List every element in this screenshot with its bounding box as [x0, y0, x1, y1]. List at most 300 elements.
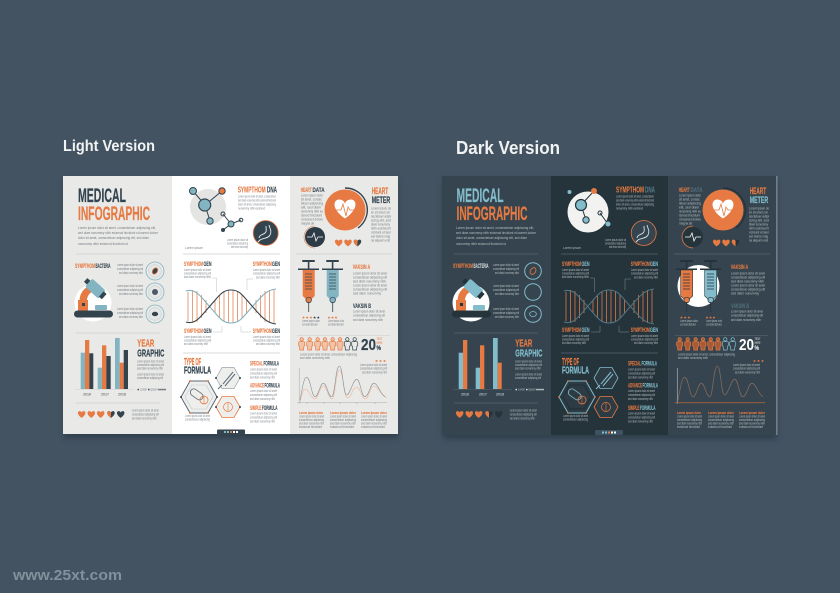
intro text: nonummy nibh euismod tincidunt ut [78, 242, 128, 246]
column note 2 [330, 411, 356, 429]
advance formula: FORMULA [642, 383, 658, 389]
panel: middle [172, 176, 290, 434]
heading: symptom dna: SYMPTHOM [238, 186, 266, 195]
column note 2: consectetuer adipiscing [708, 418, 734, 422]
heading: heart meter: HEART [750, 186, 766, 197]
heading: symptom dna: SYMPTHOM [616, 186, 644, 195]
label: gene bottom left: consectetuer adipiscing elit [562, 338, 589, 342]
column note 1: Lorem ipsum dolor sit amet [299, 414, 324, 418]
text: formula caption: Lorem ipsum dolor sit amet [185, 414, 210, 418]
label: gene top left [184, 262, 212, 279]
column note 1: Lorem ipsum dolor [677, 411, 701, 415]
title: medical infographic [456, 186, 528, 225]
stat: 20 percent: TEXT [376, 337, 383, 341]
text: hearts note: sed diam nonummy nibh [510, 416, 535, 420]
label: gene top left: Lorem ipsum dolor sit amet [184, 268, 211, 272]
text: heart meter: scing elit, sed [371, 218, 391, 222]
icon: orange syringe [676, 260, 697, 312]
text: hearts note: Lorem ipsum dolor sit amet [510, 408, 537, 412]
text: heart meter: na aliquam erat [749, 238, 768, 242]
simple formula: consectetuer adipiscing elit [628, 416, 655, 420]
text: chart note: sed diam nonummy nibh [362, 370, 387, 374]
network molecule diagram [568, 188, 610, 232]
text: bacteria note 1: Lorem ipsum dolor sit amet [493, 263, 519, 267]
heading: year graphic [137, 338, 165, 360]
caption: network left: Lorem ipsum [563, 246, 581, 250]
text: symptom dna: dolor sit amet, consectetuer adipiscing [238, 202, 276, 206]
label: gene top left: Lorem ipsum dolor sit amet [562, 268, 589, 272]
text: bacteria note 3: consectetuer adipiscing elit [493, 311, 519, 315]
intro text: sed diam nonummy nibh euismod tincidunt ut laoreet dolore [456, 231, 536, 235]
text: heart meter: eet dolore mag [371, 234, 390, 238]
advance formula: sed diam nonummy nibh [628, 397, 653, 401]
icon: teal syringe [322, 260, 343, 312]
text: heart meter: sectetuer adipi [749, 214, 769, 218]
column note 3: euismod tincidunt [361, 425, 385, 429]
icon: orange syringe [298, 260, 319, 312]
text: chart note: Lorem ipsum dolor sit amet [733, 363, 760, 367]
advance formula: sed diam nonummy nibh [250, 397, 275, 401]
text: symptom dna [238, 194, 277, 210]
column note 3: Lorem ipsum dolor [361, 411, 387, 415]
label: gene bottom left: sed diam nonummy nibh [562, 341, 586, 345]
intro text: nonummy nibh euismod tincidunt ut [456, 242, 506, 246]
heading: heart meter: METER [750, 195, 768, 206]
text: bacteria note 1 [493, 263, 519, 275]
chart legend [138, 388, 166, 392]
title: medical infographic: MEDICAL [456, 186, 504, 207]
column note 2: sed diam nonummy nibh [708, 422, 734, 426]
text: hearts note [510, 408, 537, 420]
text: symptom dna: nonummy nibh euismod [238, 206, 265, 210]
text: heart data: sit amet, consec [679, 198, 700, 202]
label: gene top right: consectetuer adipiscing elit [253, 272, 280, 276]
icon: pulse circle [682, 226, 703, 248]
icon: pulse circle [304, 226, 325, 248]
intro text: dolor sit amet, consectetuer adipiscing elit, sed diam [456, 236, 527, 240]
label: gene top left [562, 262, 590, 279]
label: gene bottom left: sed diam nonummy nibh [184, 342, 208, 346]
special formula [250, 362, 279, 380]
label: gene top right: SYMPTHOM [631, 262, 650, 268]
icon: bacteria circle 3 [146, 305, 164, 323]
label: gene bottom right: SYMPTHOM [253, 329, 272, 335]
label: gene top right [253, 262, 280, 280]
simple formula: Lorem ipsum dolor sit amet [628, 412, 655, 416]
column note 2: sed diam nonummy nibh [330, 422, 356, 426]
vaccine b: VAKSIN B [731, 304, 749, 310]
text: heart data: sit amet, consec [301, 198, 322, 202]
page tab [595, 430, 623, 435]
special formula: sed diam nonummy nibh [628, 376, 653, 380]
stat: 20 percent: 20 [739, 337, 754, 354]
text: bacteria note 1: sed diam nonummy nibh [119, 271, 143, 275]
simple formula: FORMULA [262, 406, 278, 412]
stat: 20 percent: TEXT [754, 337, 761, 341]
column note 2: euismod tincidunt [330, 425, 354, 429]
dna helix [186, 278, 276, 332]
text: people note: Lorem ipsum dolor sit amet, consectetuer adipiscing [678, 352, 735, 356]
column note 2: Lorem ipsum dolor [708, 411, 734, 415]
text: heart data: tetuer adipiscing [679, 202, 701, 206]
text: heart meter: ncidunt ut laor [749, 230, 770, 234]
label: gene bottom left: SYMPTHOM [184, 329, 203, 335]
text: formula caption [563, 414, 588, 422]
special formula: SPECIAL [628, 362, 641, 368]
hexagon: syringe [594, 368, 618, 389]
text: heart data: tetuer adipiscing [301, 202, 323, 206]
column note 3 [361, 411, 387, 429]
text: year graphic description: consectetuer adipiscing elit [515, 376, 541, 380]
text: formula caption: consectetuer adipiscing [185, 418, 210, 422]
text: bacteria note 2: sed diam nonummy nibh [119, 292, 143, 296]
caption: network right: consectetuer adipiscing [227, 242, 248, 246]
pictogram: people [677, 338, 736, 350]
vaccine a: Lorem ipsum dolor sit amet [353, 272, 387, 276]
advance formula: ADVANCE [628, 383, 642, 389]
heading: light version: Light Version [63, 138, 155, 155]
column note 1: sed diam nonummy nibh [677, 422, 702, 426]
intro text: Lorem ipsum dolor sit amet, consectetuer adipiscing elit, [78, 226, 156, 230]
label: gene bottom left [562, 328, 590, 345]
text: bacteria note 2 [117, 284, 143, 296]
panel: left [63, 176, 172, 434]
special formula: consectetuer adipiscing elit [250, 372, 277, 376]
vaccine a [731, 265, 765, 296]
vaccine b: VAKSIN B [353, 304, 371, 310]
label: gene bottom right: sed diam nonummy nibh [634, 341, 658, 345]
heading: year graphic: YEAR [515, 338, 533, 350]
label: gene bottom right: Lorem ipsum dolor sit amet [253, 335, 280, 339]
simple formula [250, 406, 278, 424]
panel: left: BACTERIA [474, 264, 489, 270]
special formula: Lorem ipsum dolor sit amet [250, 368, 277, 372]
text: bacteria note 3: sed diam nonummy nibh [495, 315, 519, 319]
label: gene bottom left: GEN [582, 328, 590, 334]
icon: microscope [452, 276, 491, 322]
label: gene top right: Lorem ipsum dolor sit amet [631, 268, 658, 272]
intro text: sed diam nonummy nibh euismod tincidunt ut laoreet dolore [78, 231, 158, 235]
panel: left [442, 176, 551, 435]
vaccine a: Lorem ipsum dolor sit amet [731, 272, 765, 276]
label: gene top left: sed diam nonummy nibh [184, 275, 211, 279]
advance formula: Lorem ipsum dolor sit amet [628, 389, 655, 393]
column note 1 [677, 411, 702, 429]
heading: year graphic: GRAPHIC [515, 348, 543, 360]
text: symptom dna: nonummy nibh euismod [616, 206, 643, 210]
text: bacteria note 1: Lorem ipsum dolor sit amet [117, 263, 143, 267]
caption: network left: Lorem ipsum [185, 246, 203, 250]
panel: left: BACTERIA [96, 264, 111, 270]
text: formula caption [185, 414, 210, 422]
text: chart note: consectetuer adipiscing elit [733, 367, 760, 371]
brochure: dark version [442, 176, 777, 435]
label: gene bottom right: GEN [272, 329, 280, 335]
text: year graphic description: sed diam nonummy nibh [137, 366, 163, 370]
caption: network right: Lorem ipsum dolor sit [605, 238, 626, 242]
text: heart data: elit, sed diam [301, 206, 321, 210]
label: gene bottom left: Lorem ipsum dolor sit amet [562, 334, 589, 338]
dna helix [564, 278, 654, 332]
caption: network right: sed diam nonummy [231, 245, 248, 249]
column note 3: Lorem ipsum dolor sit amet [361, 414, 387, 418]
heading: heart data: DATA [312, 188, 325, 194]
text: heart meter: diam nonummy [749, 222, 768, 226]
icon: heart meter gauge [324, 188, 367, 230]
rating: chart stars [375, 360, 386, 362]
text: heart data: nonummy nibh eu [301, 210, 323, 214]
text: heart data: magna ali [301, 222, 314, 226]
vaccine a: Lorem ipsum dolor sit amet [731, 284, 765, 288]
text: heart meter [371, 206, 392, 242]
column note 2: euismod tincidunt [708, 425, 732, 429]
text: symptom dna: Lorem ipsum dolor sit amet, consectetuer [616, 194, 655, 198]
text: formula caption: consectetuer adipiscing [563, 418, 588, 422]
icon: heart meter gauge [702, 188, 745, 230]
rating: teal syringe: consectetuer [706, 322, 723, 326]
text: chart note [733, 363, 760, 374]
vaccine a: VAKSIN A [353, 265, 371, 271]
special formula [628, 362, 657, 380]
rating: teal syringe [328, 316, 345, 326]
text: heart meter [749, 206, 770, 242]
heading: type of formula: TYPE OF [562, 357, 579, 368]
text: people note: Lorem ipsum dolor sit amet, consectetuer adipiscing [300, 352, 357, 356]
icon: stomach [631, 220, 656, 246]
label: gene bottom right: sed diam nonummy nibh [256, 342, 280, 346]
chart legend: Ipsum [150, 388, 158, 392]
label: gene bottom right [253, 329, 280, 346]
column note 2: consectetuer adipiscing [330, 418, 356, 422]
advance formula: FORMULA [264, 383, 280, 389]
caption: network right [605, 238, 626, 249]
simple formula: consectetuer adipiscing elit [250, 416, 277, 420]
vaccine b: consectetuer adipiscing elit [731, 314, 763, 318]
network molecule diagram [190, 188, 243, 232]
simple formula: sed diam nonummy nibh [250, 420, 275, 424]
label: gene bottom left [184, 329, 212, 346]
column note 2: Lorem ipsum dolor sit amet [330, 414, 356, 418]
heading: type of formula: FORMULA [562, 366, 589, 376]
column note 3: Lorem ipsum dolor [739, 411, 765, 415]
icon: teal syringe [700, 260, 721, 312]
heading: dark version: Dark Version [456, 138, 560, 158]
text: heart data: magna ali [679, 222, 692, 226]
text: year graphic description: consectetuer adipiscing elit [515, 363, 542, 367]
special formula: consectetuer adipiscing elit [628, 372, 655, 376]
text: bacteria note 2: Lorem ipsum dolor sit amet [493, 284, 519, 288]
vaccine a: sed diam nonummy [353, 292, 381, 296]
icon: bacteria circle 2 [146, 283, 164, 301]
vaccine b: consectetuer adipiscing elit [353, 314, 385, 318]
column note 2 [708, 411, 734, 429]
column note 2: Lorem ipsum dolor sit amet [708, 414, 734, 418]
label: gene bottom right [631, 328, 658, 345]
text: bacteria note 1: sed diam nonummy nibh [495, 271, 519, 275]
label: gene top left: SYMPTHOM [184, 262, 203, 268]
label: gene bottom left: SYMPTHOM [562, 328, 581, 334]
text: chart note: Lorem ipsum dolor sit amet [360, 363, 387, 367]
line chart [675, 366, 765, 404]
bar chart: 2017 [479, 392, 487, 396]
pictogram: people [299, 338, 358, 350]
text: people note [300, 352, 357, 360]
vaccine a: consectetuer adipiscing elit [731, 288, 765, 292]
text: heart data: ismod tincidunt [301, 214, 322, 218]
page tab [217, 430, 245, 434]
heading: heart meter [372, 186, 390, 206]
special formula: Lorem ipsum dolor sit amet [628, 368, 655, 372]
column note 3: Lorem ipsum dolor sit amet [739, 414, 765, 418]
chart legend [516, 388, 544, 392]
column note 1: Lorem ipsum dolor sit amet [677, 414, 702, 418]
heading: symptom bacteria: SYMPTHOM [453, 264, 473, 270]
text: year graphic description: sed diam nonummy nibh [515, 366, 541, 370]
vaccine a: VAKSIN A [731, 265, 749, 271]
text: chart note [360, 363, 387, 374]
advance formula: consectetuer adipiscing elit [628, 393, 655, 397]
vaccine b [731, 304, 763, 322]
text: heart meter: Lorem ipsum do [371, 206, 391, 210]
text: hearts note [132, 408, 159, 420]
label: gene top right: SYMPTHOM [253, 262, 272, 268]
column note 3: consectetuer adipiscing [739, 418, 765, 422]
simple formula [628, 406, 656, 424]
text: bacteria note 3: sed diam nonummy nibh [119, 315, 143, 319]
title: medical infographic: MEDICAL [78, 186, 126, 207]
watermark: www.25xt.com [12, 568, 122, 584]
vaccine a [353, 265, 387, 296]
text: hearts note: Lorem ipsum dolor sit amet [132, 408, 159, 412]
text: heart data [301, 194, 324, 226]
text: heart data: ismod tincidunt [679, 214, 700, 218]
hearts: meter rating [713, 240, 739, 246]
icon: bacteria circle 2 [525, 284, 541, 300]
shadow: dark brochure [443, 180, 777, 439]
label: gene top left: SYMPTHOM [562, 262, 581, 268]
rating: orange syringe: consectetuer [680, 322, 697, 326]
text: bacteria note 2: consectetuer adipiscing elit [493, 288, 519, 292]
text: year graphic description: Lorem ipsum dolor sit amet [515, 372, 542, 376]
shadow: light brochure [64, 180, 398, 438]
text: bacteria note 3: Lorem ipsum dolor sit amet [493, 307, 519, 311]
text: bacteria note 1: consectetuer adipiscing elit [117, 267, 143, 271]
text: hearts note: consectetuer adipiscing elit [510, 412, 537, 416]
column note 3 [739, 411, 765, 429]
label: gene top right: Lorem ipsum dolor sit amet [253, 268, 280, 272]
text: bacteria note 2: sed diam nonummy nibh [495, 292, 519, 296]
hexagon: pills [558, 380, 596, 414]
text: chart note: consectetuer adipiscing elit [360, 367, 387, 371]
vaccine a: sed diam nonummy nibh [731, 280, 764, 284]
vaccine a: consectetuer adipiscing elit [353, 276, 387, 280]
hexagon: pills [180, 380, 218, 414]
icon: syringes on white circle [678, 265, 720, 307]
intro text: dolor sit amet, consectetuer adipiscing elit, sed diam [78, 236, 149, 240]
label: gene top left: GEN [582, 262, 590, 268]
text: symptom dna: sed diam nonummy nibh euismod tincidunt [238, 198, 276, 202]
label: gene top left: consectetuer adipiscing elit [184, 272, 211, 276]
advance formula [628, 383, 658, 401]
text: heart meter: diam nonummy [371, 222, 390, 226]
column note 1: consectetuer adipiscing [299, 418, 324, 422]
text: bacteria note 2: consectetuer adipiscing elit [117, 288, 143, 292]
heading: heart data: HEART [679, 188, 690, 194]
column note 1: euismod tincidunt [299, 425, 322, 429]
caption: network right: sed diam nonummy [609, 245, 626, 249]
text: heart data: ut laoreet dolore [679, 218, 701, 222]
advance formula: ADVANCE [250, 383, 264, 389]
text: year graphic description [137, 360, 164, 380]
stat: 20 percent: 20 [361, 337, 376, 354]
title: medical infographic: INFOGRAPHIC [456, 204, 528, 225]
heading: type of formula [562, 357, 589, 376]
text: people note: sed diam nonummy nibh [300, 356, 330, 360]
icon: bacteria circle 1 [146, 262, 164, 280]
vaccine a: Lorem ipsum dolor sit amet [353, 284, 387, 288]
icon: microscope [74, 276, 113, 322]
text: bacteria note 2 [493, 284, 519, 296]
column note 3: consectetuer adipiscing [361, 418, 387, 422]
vaccine b: sed diam nonummy nibh [353, 318, 383, 322]
label: gene top right: sed diam nonummy nibh [256, 276, 280, 280]
text: heart meter: eet dolore mag [749, 234, 768, 238]
stat: 20 percent: % [754, 346, 760, 352]
bar chart: 2018 [496, 392, 504, 396]
vaccine b [353, 304, 385, 322]
label: gene bottom right: Lorem ipsum dolor sit amet [631, 334, 658, 338]
simple formula: Lorem ipsum dolor sit amet [250, 412, 277, 416]
chart legend: Ipsum [528, 388, 536, 392]
text: heart data: elit, sed diam [679, 206, 699, 210]
icon: bacteria circle 1 [525, 263, 541, 279]
vaccine a: consectetuer adipiscing elit [731, 276, 765, 280]
label: gene bottom left: GEN [204, 329, 212, 335]
text: year graphic description [515, 360, 542, 380]
hearts rating [78, 411, 124, 418]
intro text [456, 226, 536, 246]
vaccine a: sed diam nonummy [731, 292, 759, 296]
line chart [297, 366, 387, 404]
text: bacteria note 3: Lorem ipsum dolor sit amet [117, 307, 143, 311]
text: symptom dna: Lorem ipsum dolor sit amet, consectetuer [238, 194, 277, 198]
heading: type of formula: FORMULA [184, 366, 211, 376]
text: heart data: ut laoreet dolore [301, 218, 323, 222]
label: gene bottom left: consectetuer adipiscing elit [184, 338, 211, 342]
advance formula: Lorem ipsum dolor sit amet [250, 389, 277, 393]
text: year graphic description: consectetuer adipiscing elit [137, 363, 164, 367]
column note 1: euismod tincidunt [677, 425, 700, 429]
label: gene bottom left: Lorem ipsum dolor sit amet [184, 335, 211, 339]
stat: 20 percent: % [376, 346, 382, 352]
advance formula [250, 383, 280, 401]
text: symptom dna: dolor sit amet, consectetuer adipiscing [616, 202, 654, 206]
simple formula: sed diam nonummy nibh [628, 420, 653, 424]
hexagon: syringe [215, 368, 241, 389]
icon: bacteria circle 3 [525, 306, 541, 322]
text: hearts note: consectetuer adipiscing elit [132, 412, 159, 416]
text: bacteria note 3 [493, 307, 519, 319]
heading: symptom dna: DNA [267, 186, 277, 195]
label: gene top right: sed diam nonummy nibh [634, 276, 658, 280]
heading: heart meter: HEART [372, 186, 388, 197]
text: heart meter: sectetuer adipi [371, 214, 391, 218]
label: gene bottom right: GEN [650, 328, 658, 334]
text: symptom dna [616, 194, 655, 210]
simple formula: FORMULA [640, 406, 656, 412]
panel: right [290, 176, 398, 434]
bar chart: 2017 [101, 392, 109, 396]
